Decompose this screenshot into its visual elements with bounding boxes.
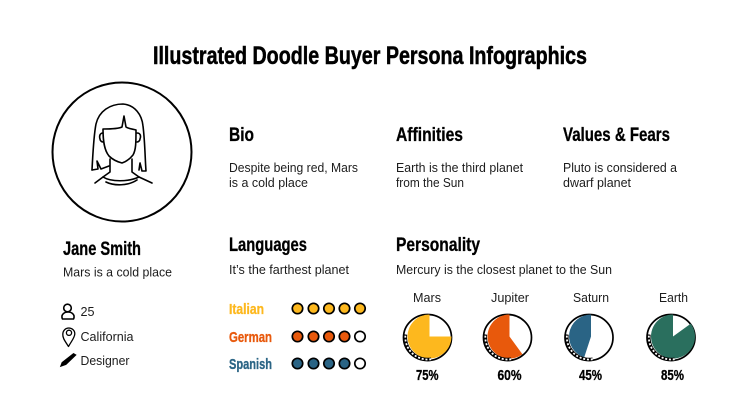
panel: bio: Despite being red, Mars [229, 161, 358, 175]
panel: affinities [396, 125, 524, 190]
icon: person [62, 304, 74, 319]
chart: Jupiter 60% [484, 291, 532, 384]
panel: values and fears [563, 125, 677, 190]
panel: affinities: from the Sun [396, 176, 464, 190]
text: location: California [80, 330, 134, 344]
panel: values and fears: Values & Fears [563, 125, 670, 146]
panel: values and fears: dwarf planet [563, 176, 632, 190]
icon: pencil [60, 354, 76, 366]
title: Illustrated Doodle Buyer Persona Infographics [153, 42, 587, 70]
panel: affinities: Affinities [396, 125, 463, 146]
panel: bio: is a cold place [229, 176, 308, 190]
chart: Jupiter 60%: Jupiter [491, 291, 529, 305]
panel: languages [229, 235, 365, 373]
heading: Jane Smith: Jane Smith [63, 239, 141, 260]
chart: Saturn 45% [565, 291, 613, 384]
text: persona tagline: Mars is a cold place [63, 266, 172, 280]
icon: location pin [63, 328, 75, 346]
chart: Earth 85%: 85% [661, 368, 684, 384]
panel: bio [229, 125, 358, 190]
panel: personality: Personality [396, 235, 480, 256]
icon: persona avatar portrait [52, 82, 192, 222]
panel: languages: Languages [229, 235, 307, 256]
chart: Mars 75%: 75% [416, 368, 439, 384]
language row: Italian: Italian [229, 302, 264, 318]
language row: Spanish: Spanish [229, 357, 272, 373]
panel: affinities: Earth is the third planet [396, 161, 524, 175]
chart: Mars 75%: Mars [413, 291, 441, 305]
text: age: 25 [80, 305, 95, 319]
chart: Mars 75% [404, 291, 452, 384]
panel: languages: It’s the farthest planet [229, 263, 350, 277]
language row: German: German [229, 330, 272, 346]
chart: Jupiter 60%: 60% [498, 368, 522, 384]
text: occupation: Designer [80, 354, 130, 368]
chart: Saturn 45%: 45% [579, 368, 602, 384]
chart: Earth 85% [647, 291, 695, 384]
panel: bio: Bio [229, 125, 254, 146]
chart: Saturn 45%: Saturn [573, 291, 609, 305]
chart: Earth 85%: Earth [659, 291, 688, 305]
panel: personality [396, 235, 695, 384]
panel: personality: Mercury is the closest planet to the Sun [396, 263, 612, 277]
panel: values and fears: Pluto is considered a [563, 161, 677, 175]
